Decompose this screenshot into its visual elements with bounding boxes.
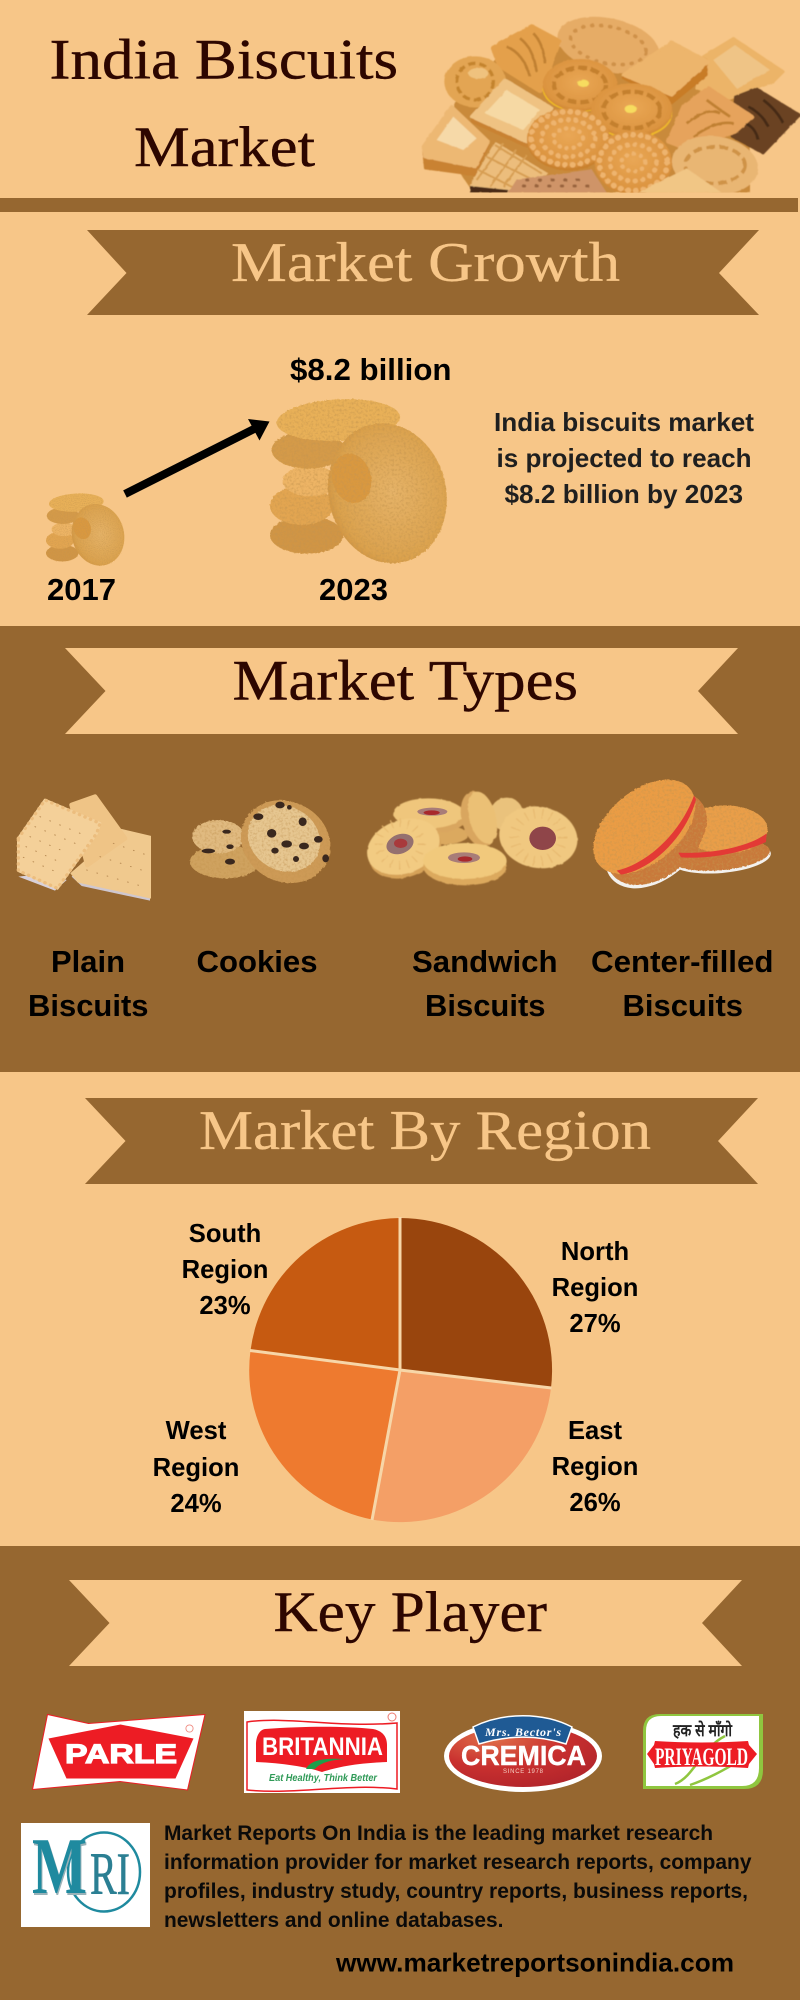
logo: Britannia: BRITANNIA [262, 1733, 383, 1761]
heading: Market Growth [87, 230, 759, 315]
pie chart: market by region [249, 1217, 552, 1522]
icon: large cookie stack 2023 [270, 396, 461, 576]
logo: Parle: PARLE [65, 1739, 177, 1769]
label: East Region 26%: 26% [569, 1489, 621, 1517]
label: Center-filled Biscuits: Biscuits [622, 988, 743, 1023]
heading: Market Types: Market Types [232, 650, 578, 712]
label: South Region 23%: South [189, 1220, 261, 1248]
label: North Region 27%: Region [552, 1274, 638, 1302]
label: $8.2 billion: $8.2 billion [290, 352, 452, 387]
label: West Region 24%: 24% [170, 1490, 222, 1518]
arrow: growth [125, 419, 270, 494]
image: jam sandwich biscuits [359, 787, 582, 888]
logo: Cremica [444, 1716, 602, 1792]
heading: Market Growth: Market Growth [231, 232, 620, 294]
logo: MRI [21, 1823, 150, 1927]
text: growth projection: India biscuits market [494, 407, 754, 437]
text: growth projection [494, 407, 754, 509]
label: Center-filled Biscuits: Center-filled [591, 944, 774, 979]
text: about Market Reports On India: newsletters and online databases. [164, 1909, 504, 1932]
text: about Market Reports On India: information provider for market research reports, company [164, 1851, 752, 1874]
title: India Biscuits [50, 28, 398, 92]
heading: Market By Region [85, 1098, 758, 1184]
panel: key players [0, 1546, 800, 2000]
title [50, 28, 398, 179]
label: Cookies: Cookies [196, 944, 318, 979]
label: East Region 26%: East [568, 1417, 623, 1445]
label: West Region 24%: West [166, 1417, 227, 1445]
logo: MRI: M [32, 1823, 87, 1911]
image: pile of biscuits [423, 8, 800, 199]
image: chocolate chip cookies [190, 785, 345, 899]
label: Plain Biscuits: Plain [51, 944, 125, 979]
text: about Market Reports On India: profiles, industry study, country reports, business reports, [164, 1880, 748, 1903]
divider bar [0, 198, 798, 212]
label: Plain Biscuits [28, 944, 148, 1023]
logo: Britannia [244, 1711, 400, 1793]
label: Sandwich Biscuits [412, 944, 558, 1023]
heading: Key Player [69, 1580, 742, 1666]
label: North Region 27% [552, 1238, 638, 1338]
text: growth projection: is projected to reach [496, 443, 752, 473]
label: Plain Biscuits: Biscuits [28, 988, 148, 1023]
logo: Priyagold [643, 1714, 763, 1789]
image: center-filled biscuits [576, 761, 772, 907]
title: Market [134, 116, 315, 179]
slice: east 26% [372, 1370, 551, 1522]
image: plain biscuits [18, 797, 150, 901]
slice: north 27% [400, 1218, 552, 1388]
logo: MRI: M [33, 1825, 88, 1913]
heading: Market Types [65, 648, 738, 734]
text: about Market Reports On India: Market Reports On India is the leading market research [164, 1822, 713, 1845]
label: South Region 23% [182, 1220, 268, 1320]
heading: Market By Region: Market By Region [199, 1100, 651, 1162]
logo: Priyagold: हक से माँगो [672, 1720, 732, 1740]
panel: market types [0, 626, 800, 1072]
label: West Region 24% [153, 1417, 239, 1518]
slice: south 23% [250, 1218, 400, 1370]
label: Center-filled Biscuits [591, 944, 774, 1023]
label: Sandwich Biscuits: Sandwich [412, 944, 558, 979]
logo: Cremica: Mrs. Bector's [484, 1725, 561, 1739]
logo: Cremica: CREMICA [461, 1740, 586, 1771]
icon: small cookie stack 2017 [46, 492, 131, 571]
label: South Region 23%: 23% [199, 1292, 251, 1320]
heading: Key Player: Key Player [274, 1581, 547, 1644]
text: about Market Reports On India [164, 1822, 752, 1932]
logo: Cremica: SINCE 1978 [503, 1769, 544, 1775]
label: West Region 24%: Region [153, 1454, 239, 1482]
label: North Region 27%: North [561, 1238, 629, 1266]
label: South Region 23%: Region [182, 1256, 268, 1284]
label: 2017: 2017 [47, 572, 116, 607]
text: website URL: www.marketreportsonindia.com [335, 1948, 734, 1978]
label: North Region 27%: 27% [569, 1310, 621, 1338]
label: East Region 26%: Region [552, 1453, 638, 1481]
text: growth projection: $8.2 billion by 2023 [504, 479, 743, 509]
label: Sandwich Biscuits: Biscuits [425, 988, 546, 1023]
slice: west 24% [249, 1350, 400, 1520]
label: East Region 26% [552, 1417, 638, 1517]
logo: MRI: RI [90, 1841, 130, 1907]
logo: Parle [32, 1714, 205, 1790]
logo: Britannia: Eat Healthy, Think Better [269, 1772, 378, 1784]
label: 2023: 2023 [319, 572, 388, 607]
